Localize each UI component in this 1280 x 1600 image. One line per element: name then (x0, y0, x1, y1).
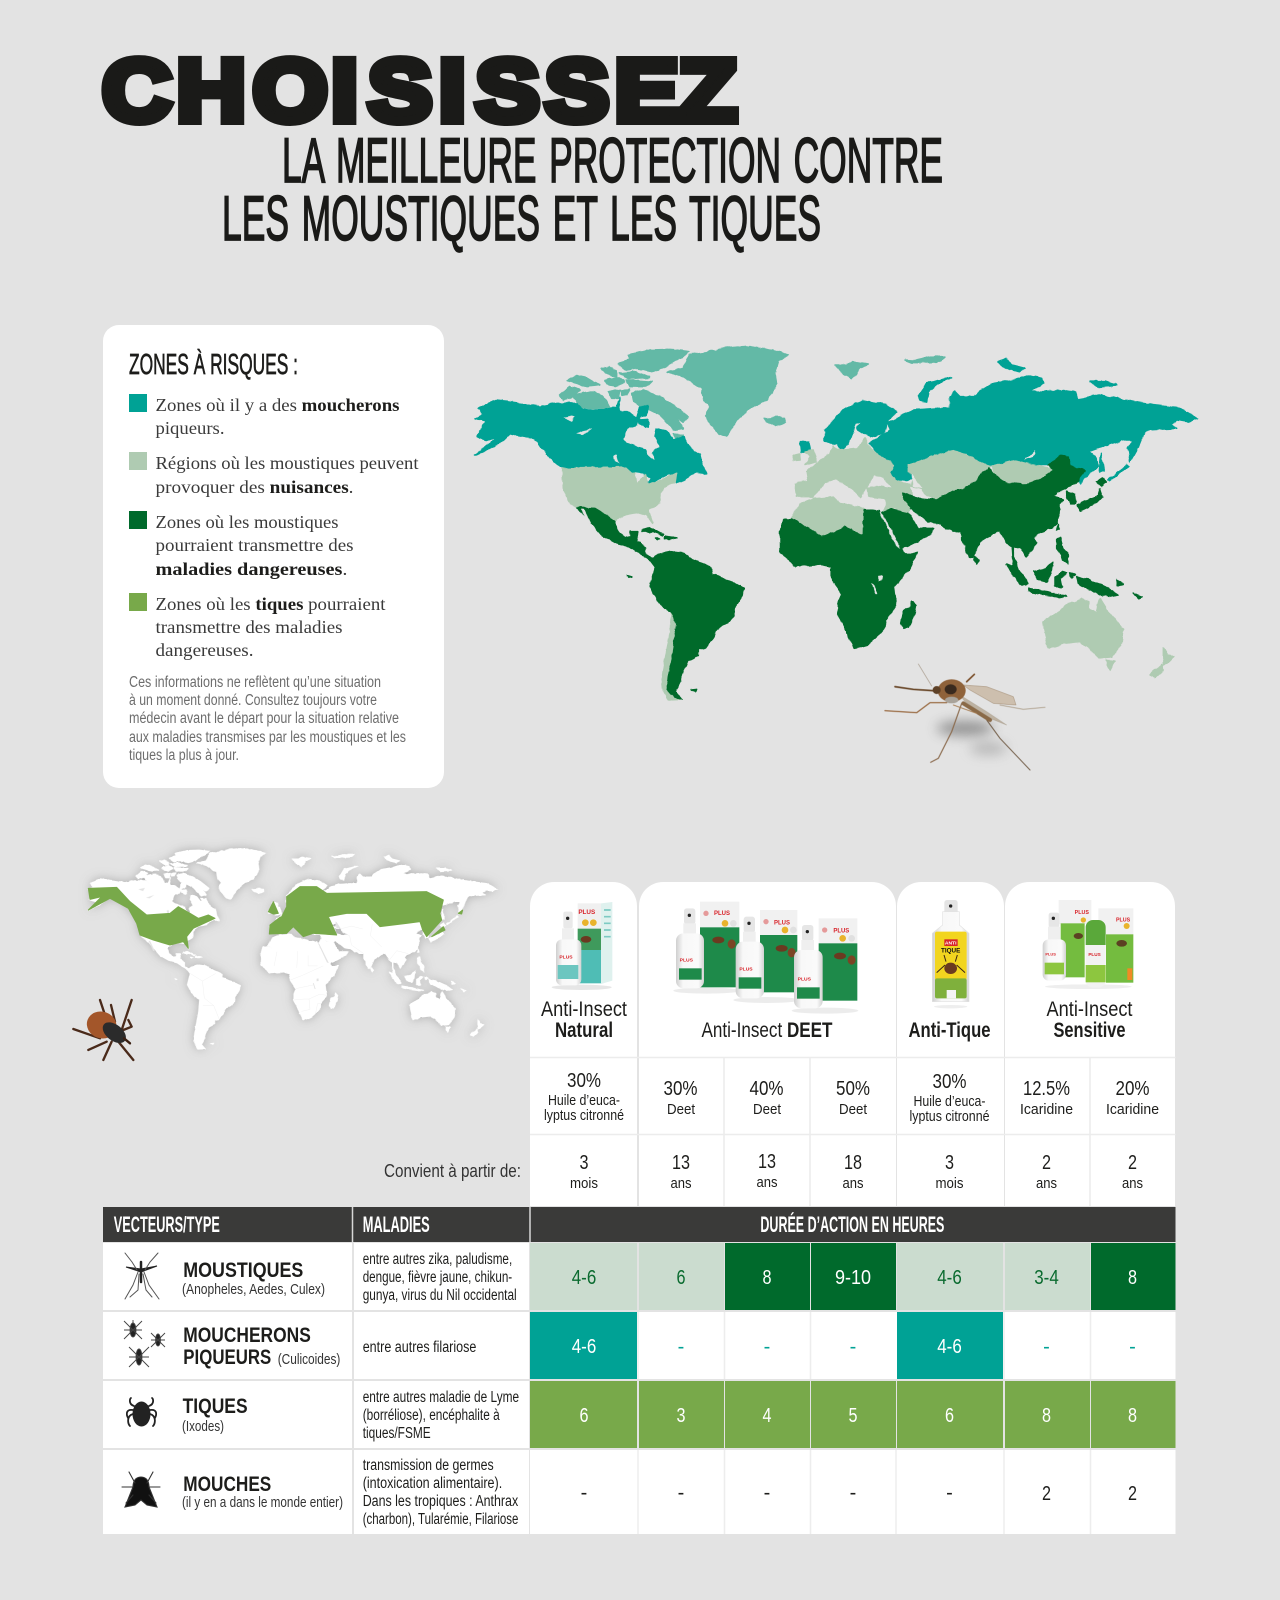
active ingredient row: lyptus citronné (910, 1108, 990, 1125)
legend note: tiques la plus à jour. (129, 747, 239, 764)
duration cells: moucherons: 4-6 (937, 1336, 962, 1358)
duration cells: mouches (581, 1312, 1137, 1534)
duration cells: tiques: 3 (676, 1405, 686, 1427)
legend item: maladies dangereuses: pourraient transmettre des (156, 535, 354, 555)
icon: fly (122, 1472, 160, 1507)
product: Anti-Tique: TIQUE (941, 948, 960, 955)
deet 1 (673, 902, 740, 994)
deet 1: PLUS (714, 911, 730, 917)
row: moustiques: dengue, fièvre jaune, chikun- (363, 1269, 512, 1286)
duration cells: tiques: 8 (1128, 1405, 1137, 1427)
deet 3: PLUS (833, 929, 849, 935)
world map: risk zones (475, 346, 1197, 700)
icon: mosquito (125, 1253, 159, 1299)
active ingredient row: Huile d’euca- (548, 1092, 620, 1109)
row: moustiques: gunya, virus du Nil occidental (363, 1287, 517, 1304)
deet 3: PLUS (798, 977, 812, 983)
photo: mosquito (885, 664, 1045, 770)
row: moucherons piqueurs: MOUCHERONS (183, 1324, 311, 1347)
duration cells: moustiques: 4-6 (937, 1267, 962, 1289)
duration cells: mouches: - (678, 1482, 684, 1504)
legend item: moucherons (129, 394, 400, 438)
legend item: maladies dangereuses (129, 511, 354, 579)
product names: Anti-Insect DEET (702, 1019, 833, 1042)
product names: Anti-Insect (541, 998, 627, 1021)
minimum age row: 2 (1042, 1152, 1051, 1174)
label: suitable from: Convient à partir de: (384, 1161, 521, 1181)
duration cells: moucherons: - (1129, 1336, 1136, 1358)
duration cells: moucherons: - (678, 1336, 684, 1358)
product names: Natural (555, 1019, 613, 1042)
duration cells: moustiques: 9-10 (835, 1267, 871, 1289)
minimum age row: 2 (1128, 1152, 1137, 1174)
legend note: Ces informations ne reflètent qu’une situation (129, 674, 381, 691)
minimum age row: ans (842, 1175, 864, 1192)
minimum age row: 13 (758, 1151, 776, 1173)
duration cells: moucherons: - (764, 1336, 770, 1358)
minimum age row: mois (570, 1175, 598, 1192)
legend note: aux maladies transmises par les moustiques et les (129, 729, 406, 746)
minimum age row: ans (1036, 1175, 1057, 1192)
row: mouches: (charbon), Tularémie, Filariose (363, 1511, 518, 1528)
deet 2 (733, 910, 800, 1003)
row: tiques: entre autres maladie de Lyme (363, 1389, 519, 1406)
row: moucherons piqueurs: entre autres filariose (363, 1339, 476, 1356)
product: Anti-Insect Natural (552, 902, 612, 990)
row: moucherons piqueurs: (Culicoides) (278, 1351, 340, 1368)
duration cells: tiques (530, 1381, 1176, 1448)
panel: zones à risques legend (103, 325, 444, 788)
active ingredient row: 50% (836, 1078, 870, 1100)
legend item: nuisances (129, 452, 418, 497)
active ingredient row: Deet (753, 1101, 782, 1118)
duration cells: mouches: - (946, 1482, 953, 1504)
table header bar (103, 1207, 1176, 1242)
legend item: tiques: Zones où les tiques pourraient (156, 594, 386, 614)
legend item: moucherons: piqueurs. (156, 418, 224, 438)
deet 2: PLUS (739, 967, 753, 973)
minimum age row: ans (670, 1175, 692, 1192)
duration cells: tiques: 4 (762, 1405, 772, 1427)
active ingredient row: 30% (932, 1071, 967, 1093)
active ingredient row: Deet (667, 1101, 696, 1118)
deet 1: PLUS (680, 958, 694, 964)
legend item: maladies dangereuses: maladies dangereuses . (156, 559, 348, 579)
legend item: tiques: transmettre des maladies (156, 617, 342, 637)
active ingredient row: 30% (664, 1078, 698, 1100)
product names: Anti-Tique (908, 1019, 990, 1042)
product: Anti-Tique: ANTI (945, 941, 957, 947)
row: moustiques: MOUSTIQUES (183, 1259, 303, 1282)
product: Anti-Insect Natural: PLUS (578, 909, 595, 916)
row: tiques: TIQUES (183, 1395, 248, 1418)
active ingredient row: 40% (750, 1078, 784, 1100)
title (102, 42, 943, 254)
duration cells: tiques: 5 (848, 1405, 858, 1427)
duration cells: moustiques (530, 1243, 1176, 1310)
duration cells: moustiques: 8 (762, 1267, 772, 1289)
legend item: tiques (129, 593, 386, 660)
product names: Sensitive (1054, 1019, 1126, 1042)
product: Anti-Insect Sensitive: PLUS (1075, 910, 1089, 916)
duration cells: tiques: 6 (945, 1405, 954, 1427)
row: tiques: (borréliose), encéphalite à (363, 1407, 500, 1424)
active ingredient row (544, 1070, 1159, 1125)
legend heading: ZONES À RISQUES : (129, 348, 298, 381)
product: Anti-Insect Sensitive: PLUS (1088, 952, 1101, 957)
row: moucherons piqueurs (124, 1320, 476, 1369)
duration cells: moustiques: 3-4 (1034, 1267, 1059, 1289)
duration cells: moucherons: - (1043, 1336, 1050, 1358)
minimum age row: ans (1122, 1175, 1143, 1192)
legend note: à un moment donné. Consultez toujours votre (129, 692, 377, 709)
duration cells: moustiques: 8 (1128, 1267, 1137, 1289)
legend item: maladies dangereuses: Zones où les moustiques (156, 512, 338, 532)
title: CHOISISSEZ: CHOISISSEZ (102, 42, 737, 140)
row: moustiques (125, 1251, 517, 1304)
row: moustiques: (Anopheles, Aedes, Culex) (182, 1281, 325, 1298)
row: moustiques: entre autres zika, paludisme, (363, 1251, 512, 1268)
row: tiques: tiques/FSME (363, 1425, 431, 1442)
legend item: moucherons: Zones où il y a des moucherons (156, 395, 400, 415)
minimum age row: mois (936, 1175, 964, 1192)
legend item: nuisances: Régions où les moustiques peuvent (156, 453, 418, 473)
duration cells: mouches: 2 (1042, 1483, 1051, 1505)
legend item: nuisances: provoquer des nuisances . (156, 477, 354, 497)
active ingredient row: 30% (567, 1070, 601, 1092)
row: mouches: transmission de germes (363, 1457, 494, 1474)
active ingredient row: Huile d’euca- (914, 1093, 986, 1110)
row: mouches: (il y en a dans le monde entier) (182, 1494, 343, 1511)
duration cells: moucherons: 4-6 (572, 1336, 596, 1358)
duration cells: moustiques: 6 (676, 1267, 686, 1289)
minimum age row (570, 1151, 1143, 1192)
product: Anti-Insect Sensitive: PLUS (1116, 918, 1131, 924)
world map: tick zones (88, 848, 497, 1049)
duration cells: mouches: - (581, 1482, 587, 1504)
row: mouches: Dans les tropiques : Anthrax (363, 1493, 518, 1510)
row: tiques (127, 1389, 519, 1442)
active ingredient row: Icaridine (1106, 1101, 1159, 1118)
active ingredient row: 12.5% (1023, 1078, 1070, 1100)
product: Anti-Insect DEET (673, 902, 858, 1014)
duration cells: mouches: - (764, 1482, 770, 1504)
row: moucherons piqueurs: PIQUEURS (183, 1346, 271, 1369)
table header bar: DURÉE D’ACTION EN HEURES (760, 1212, 944, 1237)
minimum age row: 13 (672, 1152, 690, 1174)
product: Anti-Insect Natural: PLUS (559, 954, 573, 960)
subtitle line 2: LES MOUSTIQUES ET LES TIQUES (222, 184, 821, 254)
table rows background (103, 1243, 1176, 1534)
duration cells: moucherons (530, 1312, 1136, 1379)
table header bar: VECTEURS/TYPE (114, 1212, 220, 1237)
row: mouches: (intoxication alimentaire). (363, 1475, 502, 1492)
duration cells: tiques: 8 (1042, 1405, 1051, 1427)
table (103, 882, 1176, 1534)
minimum age row: ans (756, 1174, 778, 1191)
duration cells: moustiques: 4-6 (572, 1267, 596, 1289)
product header cards (530, 882, 1175, 1206)
legend item: tiques: dangereuses. (156, 640, 254, 660)
icon: midges (124, 1320, 165, 1367)
active ingredient row: Deet (839, 1101, 868, 1118)
duration cells: tiques: 6 (580, 1405, 588, 1427)
active ingredient row: Icaridine (1020, 1101, 1073, 1118)
active ingredient row: lyptus citronné (544, 1107, 624, 1124)
photo: tick (73, 1000, 133, 1060)
deet 3 (792, 918, 858, 1014)
duration cells: moucherons: - (850, 1336, 856, 1358)
table header bar: MALADIES (363, 1212, 430, 1237)
legend note: médecin avant le départ pour la situation relative (129, 710, 399, 727)
legend note (129, 674, 406, 764)
product names: Anti-Insect (1046, 998, 1133, 1021)
minimum age row: 3 (945, 1152, 954, 1174)
duration cells: mouches: 2 (1128, 1483, 1137, 1505)
row: mouches (122, 1457, 518, 1528)
product: Anti-Insect Sensitive: PLUS (1045, 951, 1056, 956)
row: mouches: MOUCHES (183, 1473, 271, 1496)
icon: tick (127, 1398, 156, 1426)
product: Anti-Insect Sensitive (1043, 900, 1133, 989)
minimum age row: 3 (580, 1152, 588, 1174)
row: tiques: (Ixodes) (182, 1418, 224, 1435)
product names (541, 998, 1133, 1042)
minimum age row: 18 (844, 1152, 862, 1174)
duration cells: mouches: - (850, 1482, 856, 1504)
product: Anti-Tique (932, 900, 969, 1008)
active ingredient row: 20% (1116, 1078, 1150, 1100)
tick zones overlay (88, 887, 463, 948)
deet 2: PLUS (774, 920, 790, 926)
